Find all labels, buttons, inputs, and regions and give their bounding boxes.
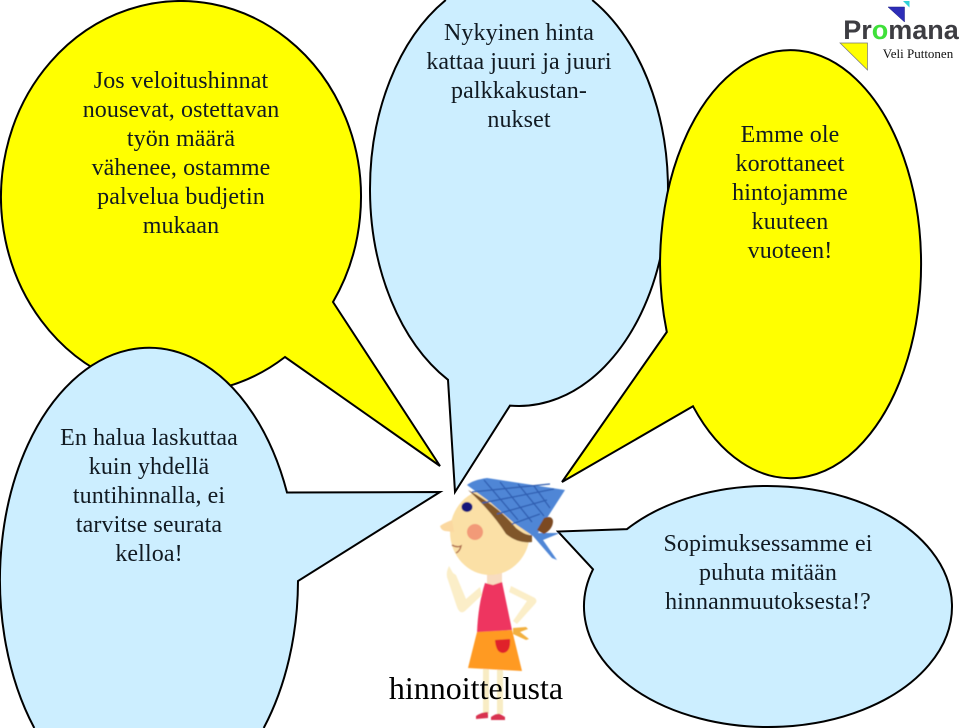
speech bubble: blue lower right xyxy=(558,486,952,727)
text: blue left bubble: tarvitse seurata xyxy=(76,512,222,538)
skirt xyxy=(468,630,522,671)
logo: Promana xyxy=(840,1,960,70)
cheek xyxy=(467,524,483,540)
text: blue left bubble: tuntihinnalla, ei xyxy=(73,483,225,509)
text: blue centre bubble: Nykyinen hinta xyxy=(444,20,594,46)
text: blue centre bubble: nukset xyxy=(487,107,551,133)
speech bubble: blue left xyxy=(0,348,440,728)
logo triangles xyxy=(888,7,904,22)
text: yellow right bubble: vuoteen! xyxy=(748,238,832,264)
shoes xyxy=(476,712,505,720)
text: blue centre bubble: kattaa juuri ja juuri xyxy=(426,49,612,75)
text: blue centre bubble: palkkakustan- xyxy=(451,78,587,104)
scarf plaid xyxy=(472,480,554,524)
text: yellow left bubble: vähenee, ostamme xyxy=(92,155,270,181)
neck xyxy=(487,570,502,586)
speech bubble: yellow right xyxy=(562,50,921,482)
caption: hinnoittelusta xyxy=(389,670,563,706)
eye xyxy=(462,502,472,512)
text: yellow right bubble: Emme ole xyxy=(741,122,839,148)
legs xyxy=(483,668,503,714)
logo wordmark: Promana xyxy=(843,15,960,45)
hair bun xyxy=(537,517,553,534)
text: yellow right bubble: hintojamme xyxy=(732,180,848,206)
text: yellow left bubble: Jos veloitushinnat xyxy=(94,68,268,94)
head xyxy=(450,489,530,575)
text: blue left bubble: En halua laskuttaa xyxy=(60,425,238,451)
text: yellow right bubble: kuuteen xyxy=(752,209,828,235)
text: blue left bubble: kuin yhdellä xyxy=(89,454,209,480)
headscarf xyxy=(467,478,565,560)
torso xyxy=(477,582,512,633)
speech bubble: yellow left xyxy=(1,1,440,466)
text: yellow left bubble: palvelua budjetin xyxy=(97,184,265,210)
illustration: girl with blue headscarf xyxy=(440,478,565,720)
text: blue left bubble: kelloa! xyxy=(115,541,183,567)
apron ties xyxy=(513,627,529,640)
text: yellow left bubble: mukaan xyxy=(143,213,219,239)
hair xyxy=(468,490,532,542)
text: yellow left bubble: nousevat, ostettavan xyxy=(83,97,279,123)
logo byline: Veli Puttonen xyxy=(883,46,954,61)
speech bubble: blue centre xyxy=(370,0,668,492)
text: blue lower right bubble: puhuta mitään xyxy=(699,560,837,586)
text: yellow right bubble: korottaneet xyxy=(735,151,845,177)
mouth xyxy=(452,545,461,553)
arms xyxy=(447,566,482,612)
text: yellow left bubble: työn määrä xyxy=(127,126,235,152)
nose xyxy=(440,520,454,532)
text: blue lower right bubble: hinnanmuutoksesta!? xyxy=(665,589,871,615)
pocket xyxy=(495,639,510,653)
text: blue lower right bubble: Sopimuksessamme ei xyxy=(663,531,873,557)
